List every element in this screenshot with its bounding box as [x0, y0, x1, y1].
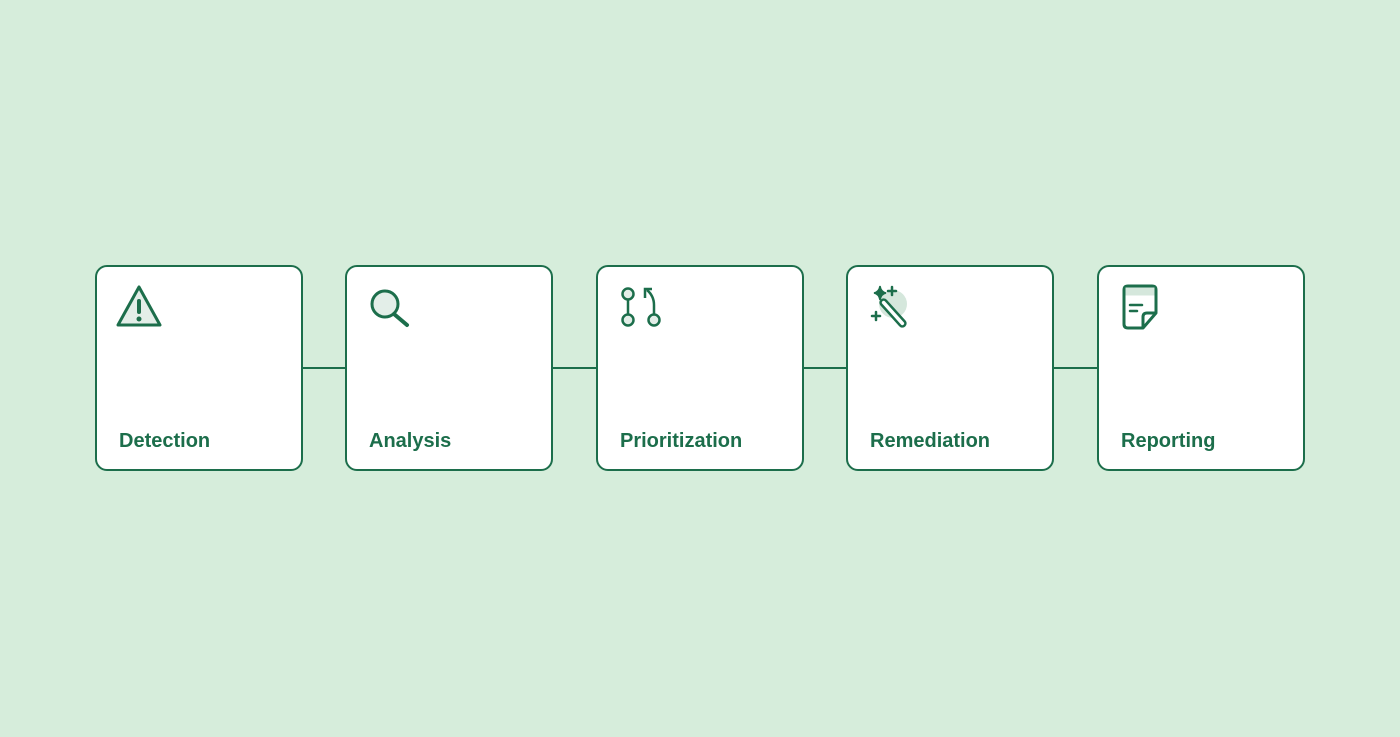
connector lines: [300, 367, 1300, 369]
icon: magnifier: [370, 290, 410, 328]
icon: magic wand: [870, 286, 907, 328]
card: Remediation: [846, 265, 1054, 471]
label: Detection: [119, 430, 210, 452]
icon: document: [1122, 284, 1158, 330]
label: Prioritization: [620, 430, 742, 452]
icon: warning: [116, 285, 162, 326]
label: Remediation: [870, 430, 990, 452]
card: Prioritization: [596, 265, 804, 471]
card: Detection: [95, 265, 303, 471]
card: Reporting: [1097, 265, 1305, 471]
label: Reporting: [1121, 430, 1215, 452]
icon: branches: [621, 287, 661, 327]
card: Analysis: [345, 265, 553, 471]
label: Analysis: [369, 430, 451, 452]
